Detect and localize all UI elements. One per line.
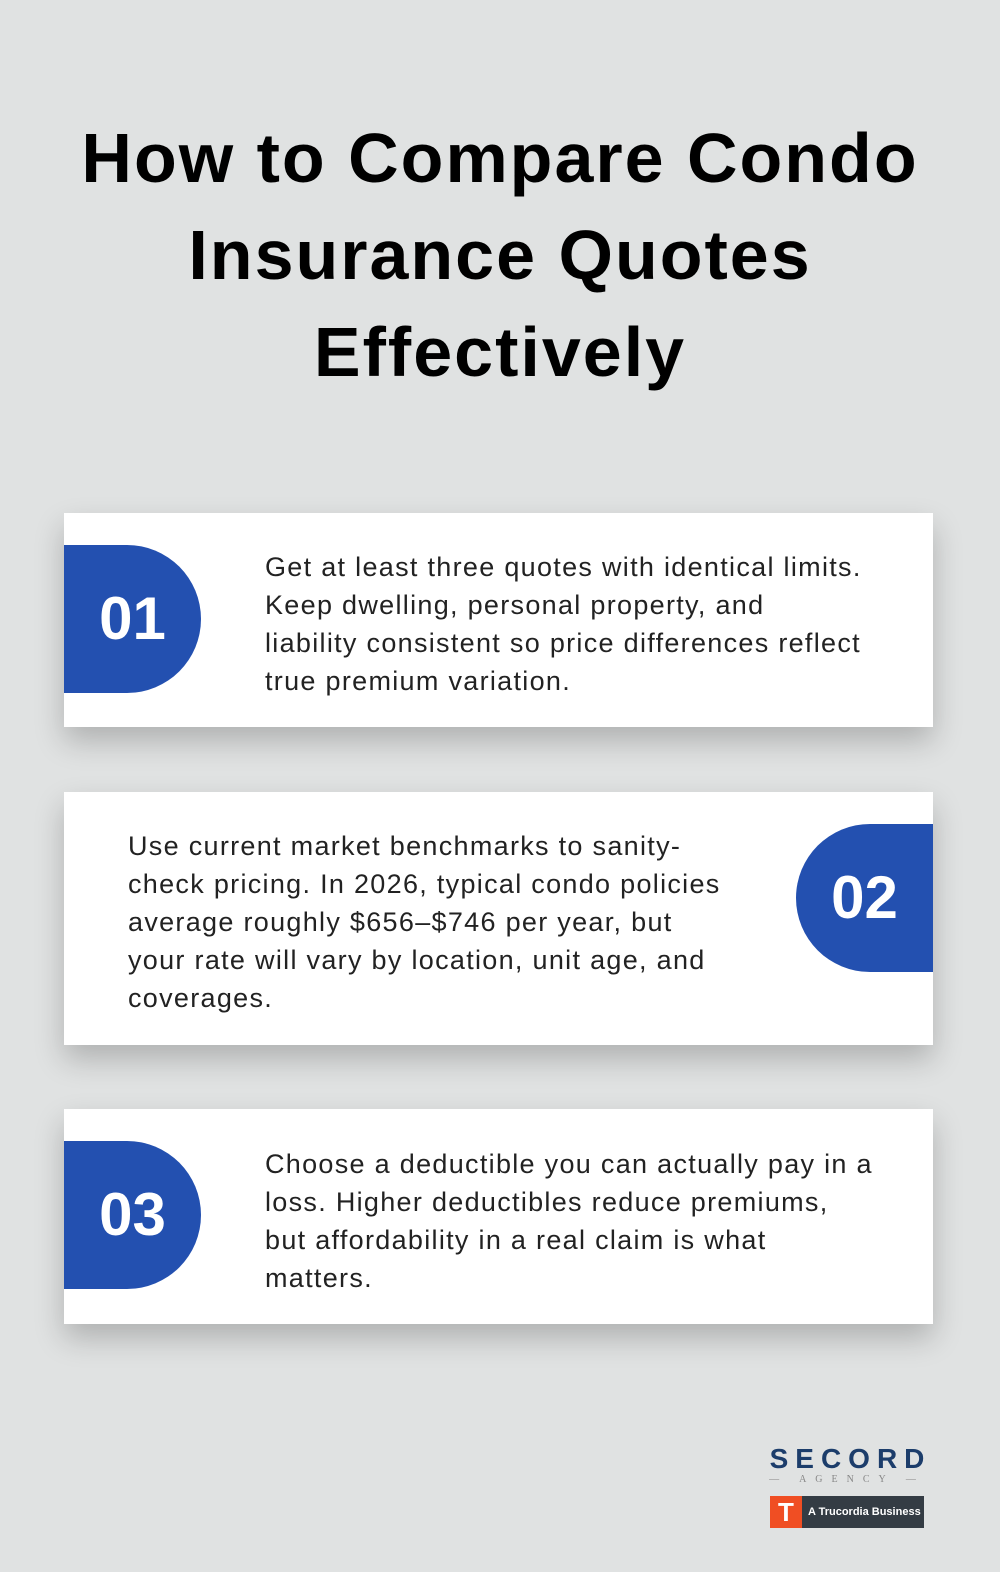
badge 03: 03: [99, 1181, 166, 1248]
logo wordmark: SECORD: [770, 1443, 931, 1474]
title: How to Compare Condo: [81, 119, 919, 197]
logo: [769, 1443, 931, 1528]
text step 1: [265, 552, 862, 696]
text step 3: matters.: [265, 1263, 373, 1293]
text step 1: Keep dwelling, personal property, and: [265, 590, 764, 620]
panel: step 1: [64, 513, 933, 727]
text step 1: liability consistent so price differences reflect: [265, 628, 861, 658]
text step 3: Choose a deductible you can actually pay in a: [265, 1149, 873, 1179]
title: Insurance Quotes: [188, 216, 812, 294]
badge 01: 01: [99, 585, 166, 652]
badge 02: 02: [831, 864, 898, 931]
text step 3: but affordability in a real claim is what: [265, 1225, 767, 1255]
panel: step 3: [64, 1109, 933, 1324]
badge 02: [796, 824, 933, 972]
text step 1: true premium variation.: [265, 666, 571, 696]
text step 2: Use current market benchmarks to sanity-: [128, 831, 681, 861]
panel: step 2: [64, 792, 933, 1045]
text step 1: Get at least three quotes with identical limits.: [265, 552, 862, 582]
text step 3: [265, 1149, 873, 1293]
logo subtitle: — AGENCY —: [769, 1474, 925, 1485]
text step 2: your rate will vary by location, unit age, and: [128, 945, 706, 975]
badge 03: [64, 1141, 201, 1289]
text step 3: loss. Higher deductibles reduce premiums,: [265, 1187, 829, 1217]
logo badge: T: [778, 1497, 794, 1527]
badge 01: [64, 545, 201, 693]
text step 2: check pricing. In 2026, typical condo policies: [128, 869, 721, 899]
text step 2: [128, 831, 721, 1013]
title: [81, 119, 919, 391]
logo badge: A Trucordia Business: [808, 1506, 921, 1518]
text step 2: coverages.: [128, 983, 273, 1013]
title: Effectively: [314, 313, 686, 391]
logo badge: [770, 1496, 924, 1528]
text step 2: average roughly $656–$746 per year, but: [128, 907, 673, 937]
